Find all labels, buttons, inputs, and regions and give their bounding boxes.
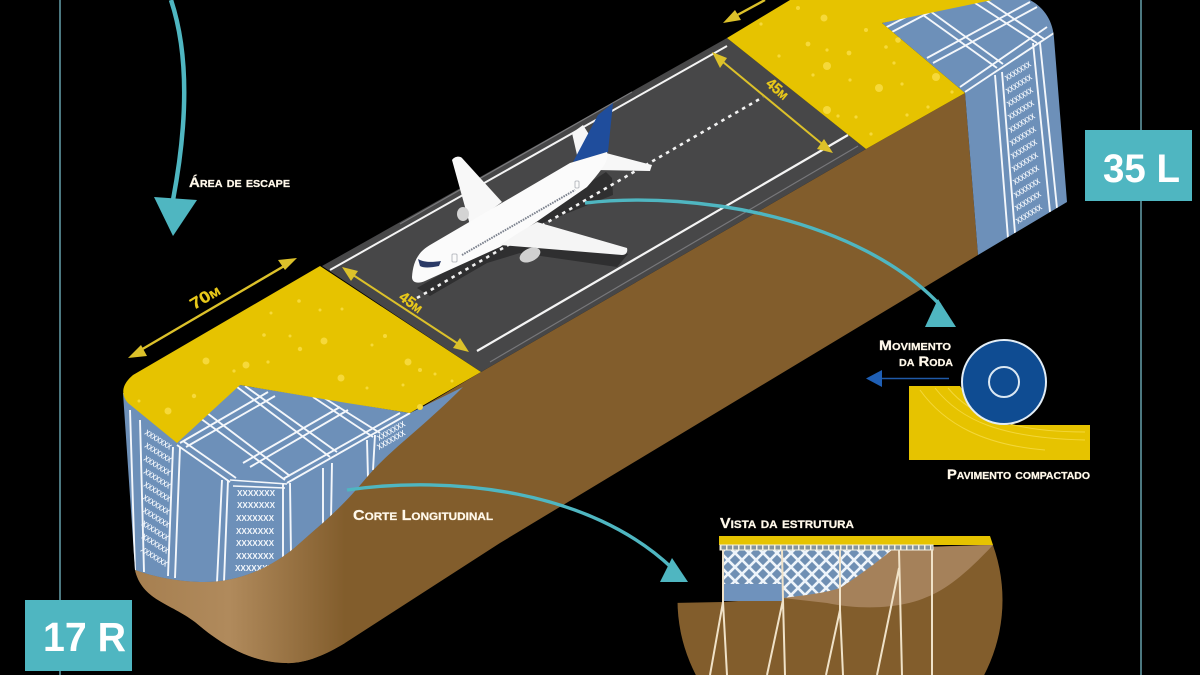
near wing [500, 222, 627, 255]
mesh markings: XXXXXXX [142, 480, 173, 504]
arrow: structure view [347, 485, 688, 582]
airplane [412, 103, 652, 283]
rear grid lines [885, 0, 1057, 238]
rear mesh markings: XXXXXXX [1013, 189, 1043, 213]
mesh markings: XXXXXXX [237, 489, 276, 498]
rear retaining structure [882, 0, 1067, 255]
escape area rear (yellow) [727, 0, 992, 149]
rear mesh markings: XXXXXXX [1003, 59, 1033, 83]
deck strip [720, 545, 933, 550]
dimension arrow 70m [128, 258, 297, 358]
dimension arrow 45m front: 45m [396, 288, 426, 317]
runway edge lines [330, 46, 727, 270]
runway surface [322, 38, 866, 372]
rear mesh markings [1003, 59, 1044, 226]
near stabilizer [597, 153, 652, 171]
rear mesh markings: XXXXXXX [1014, 202, 1044, 226]
mesh markings: XXXXXXX [237, 501, 276, 510]
rear mesh markings: XXXXXXX [1009, 137, 1039, 161]
mesh markings: XXXXXXX [376, 428, 407, 452]
mesh markings: XXXXXXX [143, 428, 174, 452]
far wing [452, 157, 502, 225]
rear mesh markings: XXXXXXX [1007, 111, 1037, 135]
mesh markings: XXXXXXX [142, 467, 173, 491]
wheel [962, 340, 1046, 424]
label: área de escape: Área de escape [189, 174, 290, 190]
engine near [517, 244, 543, 266]
badge 35 L: 35 L [1103, 147, 1180, 191]
soil section [670, 544, 1010, 675]
mesh markings: XXXXXXX [141, 506, 172, 530]
wheel compaction detail [866, 337, 1090, 482]
mesh markings: XXXXXXX [142, 454, 173, 478]
mesh markings: XXXXXXX [236, 527, 275, 536]
mesh markings: XXXXXXX [143, 441, 174, 465]
mesh markings: XXXXXXX [140, 532, 171, 556]
guide line left [59, 0, 61, 675]
compacted pavement [909, 386, 1090, 460]
runway block [123, 0, 1067, 663]
cockpit window [418, 259, 441, 268]
front retaining structure [123, 385, 463, 582]
label: vista da estrutura: Vista da estrutura [720, 515, 854, 532]
mesh markings: XXXXXXX [141, 493, 172, 517]
soil side of the block [135, 93, 978, 663]
guide line right [1140, 0, 1142, 675]
rear mesh markings: XXXXXXX [1004, 72, 1034, 96]
label: movimento da roda: Movimento [879, 337, 951, 353]
rear mesh markings: XXXXXXX [1005, 85, 1035, 109]
soil fill below pavement [783, 545, 993, 607]
mesh markings: XXXXXXX [140, 519, 171, 543]
dimension arrow 45m rear: 45m [762, 75, 792, 103]
label: corte longitudinal: Corte Longitudinal [353, 507, 493, 524]
arrow: escape area [154, 0, 197, 236]
escape area front (yellow) [123, 266, 481, 443]
wheel hub [989, 367, 1019, 397]
rear mesh markings: XXXXXXX [1006, 98, 1036, 122]
label: pavimento compactado: Pavimento compactado [947, 466, 1090, 482]
mesh markings: XXXXXXX [376, 419, 407, 443]
mesh markings: XXXXXXX [236, 552, 275, 561]
anchors [710, 550, 932, 675]
tail stabilizer rear [572, 125, 590, 155]
airplane shadow [417, 172, 628, 296]
engine far [457, 207, 469, 221]
mesh markings: XXXXXXX [236, 539, 275, 548]
rear mesh markings: XXXXXXX [1008, 124, 1038, 148]
fin [573, 103, 613, 162]
badge 35 L [1085, 130, 1192, 201]
badge 17 R [25, 600, 132, 671]
dimension arrow top [723, 0, 765, 23]
blue wall base [723, 584, 782, 601]
passenger windows [462, 190, 575, 255]
mesh markings: XXXXXXX [139, 545, 170, 569]
dimension arrow 45m front [342, 267, 469, 352]
direction arrow [880, 378, 949, 380]
mesh wall [722, 549, 893, 600]
doors [452, 254, 457, 262]
rear mesh markings: XXXXXXX [1012, 176, 1042, 200]
rear mesh markings: XXXXXXX [1011, 163, 1041, 187]
arrow: wheel detail [585, 200, 956, 327]
front grid lines [130, 386, 410, 582]
mesh markings: XXXXXXX [236, 514, 275, 523]
badge 17 R: 17 R [43, 614, 126, 660]
soil rounded corner [135, 500, 345, 663]
pavement compaction lines [920, 388, 1085, 450]
fuselage [412, 152, 608, 283]
structure view [670, 515, 1010, 675]
pavement top [719, 536, 993, 545]
dimension arrow 45m rear [712, 52, 833, 153]
dimension arrow 70m: 70m [187, 282, 223, 313]
label: da roda: da Roda [899, 353, 953, 369]
mesh markings [139, 419, 407, 573]
direction arrowhead [866, 370, 882, 387]
mesh markings: XXXXXXX [235, 564, 274, 573]
rear mesh markings: XXXXXXX [1010, 150, 1040, 174]
centre line [417, 97, 763, 298]
